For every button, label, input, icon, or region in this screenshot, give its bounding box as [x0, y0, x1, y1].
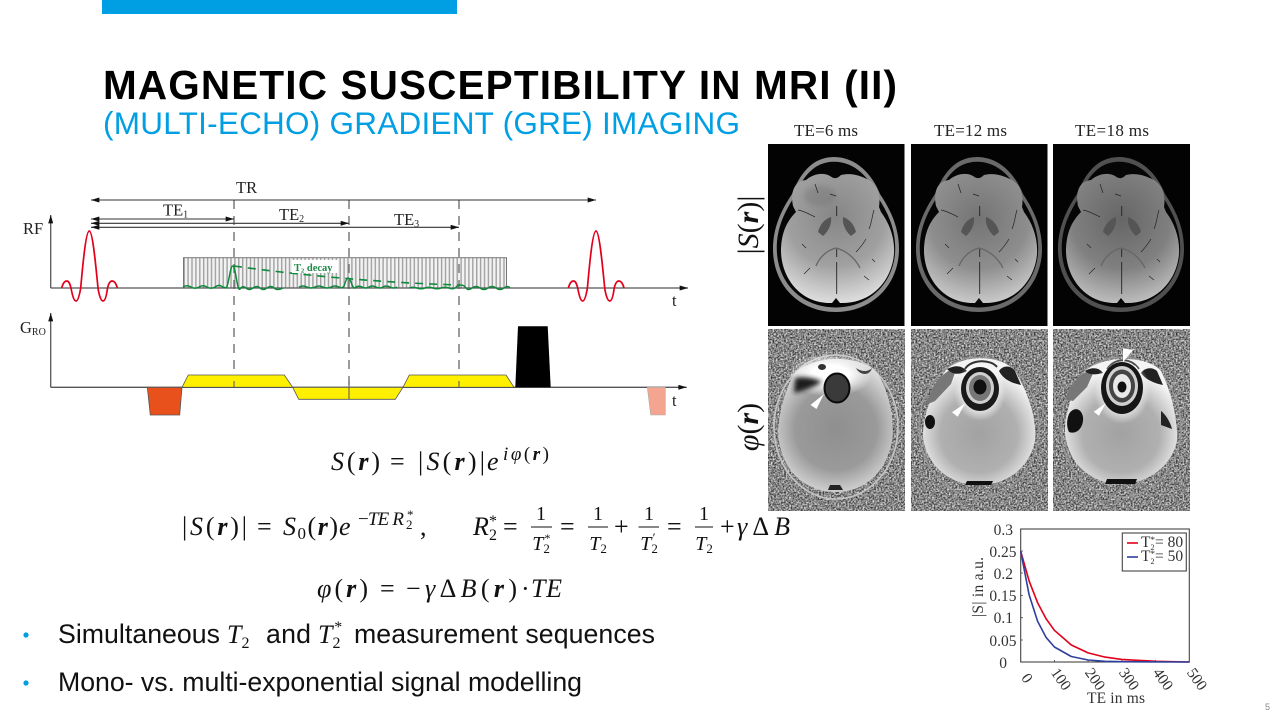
- top accent bar: [102, 0, 457, 14]
- RF pulse 1: [62, 231, 117, 301]
- readout hatch block: [184, 258, 506, 288]
- decay chart: [970, 522, 1210, 707]
- legend: *: [1150, 535, 1155, 545]
- fractions: ′: [652, 530, 655, 545]
- legend: 2: [1150, 543, 1154, 552]
- RF pulse 2: [568, 231, 624, 301]
- column headers: TE=18 ms: [1075, 121, 1149, 140]
- equation: complex signal: =: [390, 447, 405, 476]
- equation: magnitude decay: *: [407, 507, 414, 522]
- timing labels: 3: [414, 219, 419, 230]
- phase image TE 18 ms: [1053, 329, 1190, 511]
- equation: phase: φ(r): [317, 574, 368, 603]
- equation: magnitude decay: 2: [406, 517, 412, 532]
- T2* decay label: decay: [304, 263, 333, 274]
- page number: 5: [1265, 702, 1270, 712]
- equation: complex signal: e: [487, 447, 499, 476]
- RF axis labels: [23, 219, 677, 310]
- fractions: 1: [593, 503, 603, 525]
- readout lobe 2: [293, 387, 403, 399]
- T2* decay label: 2: [301, 268, 304, 274]
- phase image TE 6 ms: [768, 329, 905, 511]
- fractions: *: [544, 531, 550, 545]
- equation: magnitude decay: 0: [298, 524, 306, 543]
- equation: phase: =: [380, 574, 395, 603]
- fractions: T: [640, 533, 651, 555]
- equation: complex signal: |S(r)|: [418, 447, 485, 476]
- phase image TE 12 ms: [911, 329, 1048, 511]
- y tick labels: 0.25: [989, 544, 1017, 561]
- fractions: 2: [543, 541, 550, 556]
- timing labels: TE: [394, 210, 414, 229]
- T2* decay dashed curve: [234, 266, 460, 285]
- gradient axes: [51, 313, 687, 387]
- fractions: 2: [651, 541, 658, 556]
- equation: magnitude decay: =: [257, 512, 272, 541]
- x tick labels: 100: [1047, 665, 1074, 694]
- row label: phase: φ(r): [732, 403, 765, 451]
- fractions: 1: [699, 503, 709, 525]
- y tick labels: 0.05: [989, 633, 1017, 650]
- x axis title: TE in ms: [1087, 690, 1145, 707]
- equation: magnitude decay: S: [283, 512, 296, 541]
- bullet 1: measurement sequences: [354, 619, 655, 649]
- bullet 1: Simultaneous: [58, 619, 220, 649]
- R2* symbol: *: [489, 513, 497, 530]
- bullet 1: 2: [241, 635, 249, 652]
- legend: T: [1141, 548, 1150, 565]
- y tick labels: 0.1: [994, 610, 1013, 627]
- legend: [1122, 533, 1186, 571]
- equation: phase: ·: [521, 574, 530, 603]
- bullet 1: T: [227, 620, 241, 649]
- equation: complex signal: S(r): [331, 447, 380, 476]
- column headers: TE=6 ms: [794, 121, 858, 140]
- operators: +: [614, 512, 629, 541]
- x tick labels: 500: [1183, 665, 1210, 694]
- operators: =: [667, 512, 682, 541]
- readout lobe 1: [182, 375, 293, 387]
- y tick labels: 0.3: [994, 522, 1013, 539]
- dephasing lobe: [147, 387, 182, 415]
- timing arrows: [91, 200, 596, 227]
- pulse sequence diagram: [20, 178, 688, 415]
- equation: magnitude decay: |S(r)|: [182, 512, 247, 541]
- fractions: 2: [600, 541, 607, 556]
- equation: phase: TE: [531, 574, 562, 603]
- gradient axis labels: RO: [32, 327, 46, 338]
- bullet 2: Mono- vs. multi-exponential signal modelling: [58, 667, 582, 697]
- y tick labels: 0.2: [994, 566, 1013, 583]
- y tick labels: 0.15: [989, 588, 1017, 605]
- timing labels: TR: [236, 178, 257, 197]
- equation: phase: −γΔB(r): [406, 574, 517, 603]
- R2* symbol: =: [503, 512, 518, 541]
- subtitle: (MULTI-ECHO) GRADIENT (GRE) IMAGING: [103, 105, 740, 141]
- equation: magnitude decay: ,: [420, 512, 426, 541]
- fractions: T: [532, 533, 543, 555]
- gradient axis labels: G: [20, 318, 32, 337]
- green echo signal: [183, 266, 510, 290]
- equation: magnitude decay: (: [308, 512, 316, 541]
- operators: =: [560, 512, 575, 541]
- equation: magnitude decay: e: [339, 512, 351, 541]
- equation: complex signal: [331, 444, 549, 476]
- curve T2*=50: [1021, 551, 1189, 662]
- equation: relaxation rate: [472, 503, 790, 556]
- magnitude image TE 12 ms: [911, 144, 1048, 326]
- y tick labels: [989, 522, 1017, 672]
- bullet 1: 2: [332, 635, 340, 652]
- fractions: T: [695, 533, 706, 555]
- equation: magnitude decay: [182, 507, 426, 543]
- timing labels: TE: [279, 205, 299, 224]
- operators: γΔB: [737, 512, 790, 541]
- gradient axis labels: t: [672, 391, 677, 410]
- fractions: 2: [706, 541, 713, 556]
- bullet list: [23, 619, 655, 697]
- equation: phase: [317, 574, 562, 603]
- equation: magnitude decay: −TE R: [358, 509, 404, 530]
- magnitude image TE 6 ms: [768, 144, 904, 326]
- equation: magnitude decay: r): [318, 512, 338, 541]
- spoiler gradient: [515, 326, 551, 387]
- RF axis labels: t: [672, 291, 677, 310]
- legend: *: [1150, 549, 1155, 559]
- legend: = 80: [1155, 534, 1183, 551]
- axis ticks: [1021, 551, 1156, 662]
- y axis title: |S| in a.u.: [970, 557, 987, 617]
- next dephasing lobe: [647, 387, 665, 415]
- readout lobe 3: [403, 375, 514, 387]
- x tick labels: 200: [1081, 665, 1108, 694]
- legend: = 50: [1155, 548, 1183, 565]
- timing labels: [163, 178, 419, 230]
- R2* symbol: 2: [489, 527, 497, 544]
- magnitude image TE 18 ms: [1053, 144, 1190, 326]
- bullet 1: T: [318, 620, 332, 649]
- R2* symbol: R: [472, 512, 489, 541]
- fractions: 1: [536, 503, 546, 525]
- operators: +: [720, 512, 735, 541]
- column headers: [794, 121, 1149, 140]
- timing labels: TE: [163, 200, 183, 220]
- bullet 1: [23, 619, 655, 652]
- RF axes: [51, 215, 688, 288]
- T2* decay label: [292, 260, 338, 274]
- x tick labels: [1018, 665, 1210, 694]
- RF axis labels: RF: [23, 219, 43, 238]
- row label: magnitude: |S(r)|: [732, 196, 765, 254]
- x tick labels: 300: [1115, 665, 1142, 694]
- plot frame: [1021, 529, 1189, 662]
- fractions: [532, 503, 713, 556]
- fractions: 1: [644, 503, 654, 525]
- bullet 1: and: [266, 619, 311, 649]
- R2* symbol: [472, 512, 518, 544]
- timing labels: 2: [299, 214, 304, 225]
- echo time dashed lines: [234, 200, 459, 388]
- title: MAGNETIC SUSCEPTIBILITY IN MRI (II): [103, 62, 897, 108]
- dashed tick overlay: [234, 381, 459, 399]
- legend: 2: [1150, 557, 1154, 566]
- T2* decay label: T: [294, 263, 301, 274]
- equation: complex signal: iφ(r): [503, 444, 549, 465]
- x tick labels: 0: [1018, 670, 1036, 687]
- bullet 1: *: [333, 619, 341, 636]
- fraction bars: [531, 526, 713, 528]
- gradient axis labels: [20, 318, 677, 410]
- timing labels: 1: [183, 210, 188, 220]
- fractions: T: [589, 533, 600, 555]
- y tick labels: 0: [999, 655, 1007, 672]
- operators: [560, 512, 790, 541]
- curve T2*=80: [1021, 551, 1189, 662]
- x tick labels: 400: [1149, 665, 1176, 694]
- legend: T: [1141, 534, 1150, 551]
- column headers: TE=12 ms: [934, 121, 1007, 140]
